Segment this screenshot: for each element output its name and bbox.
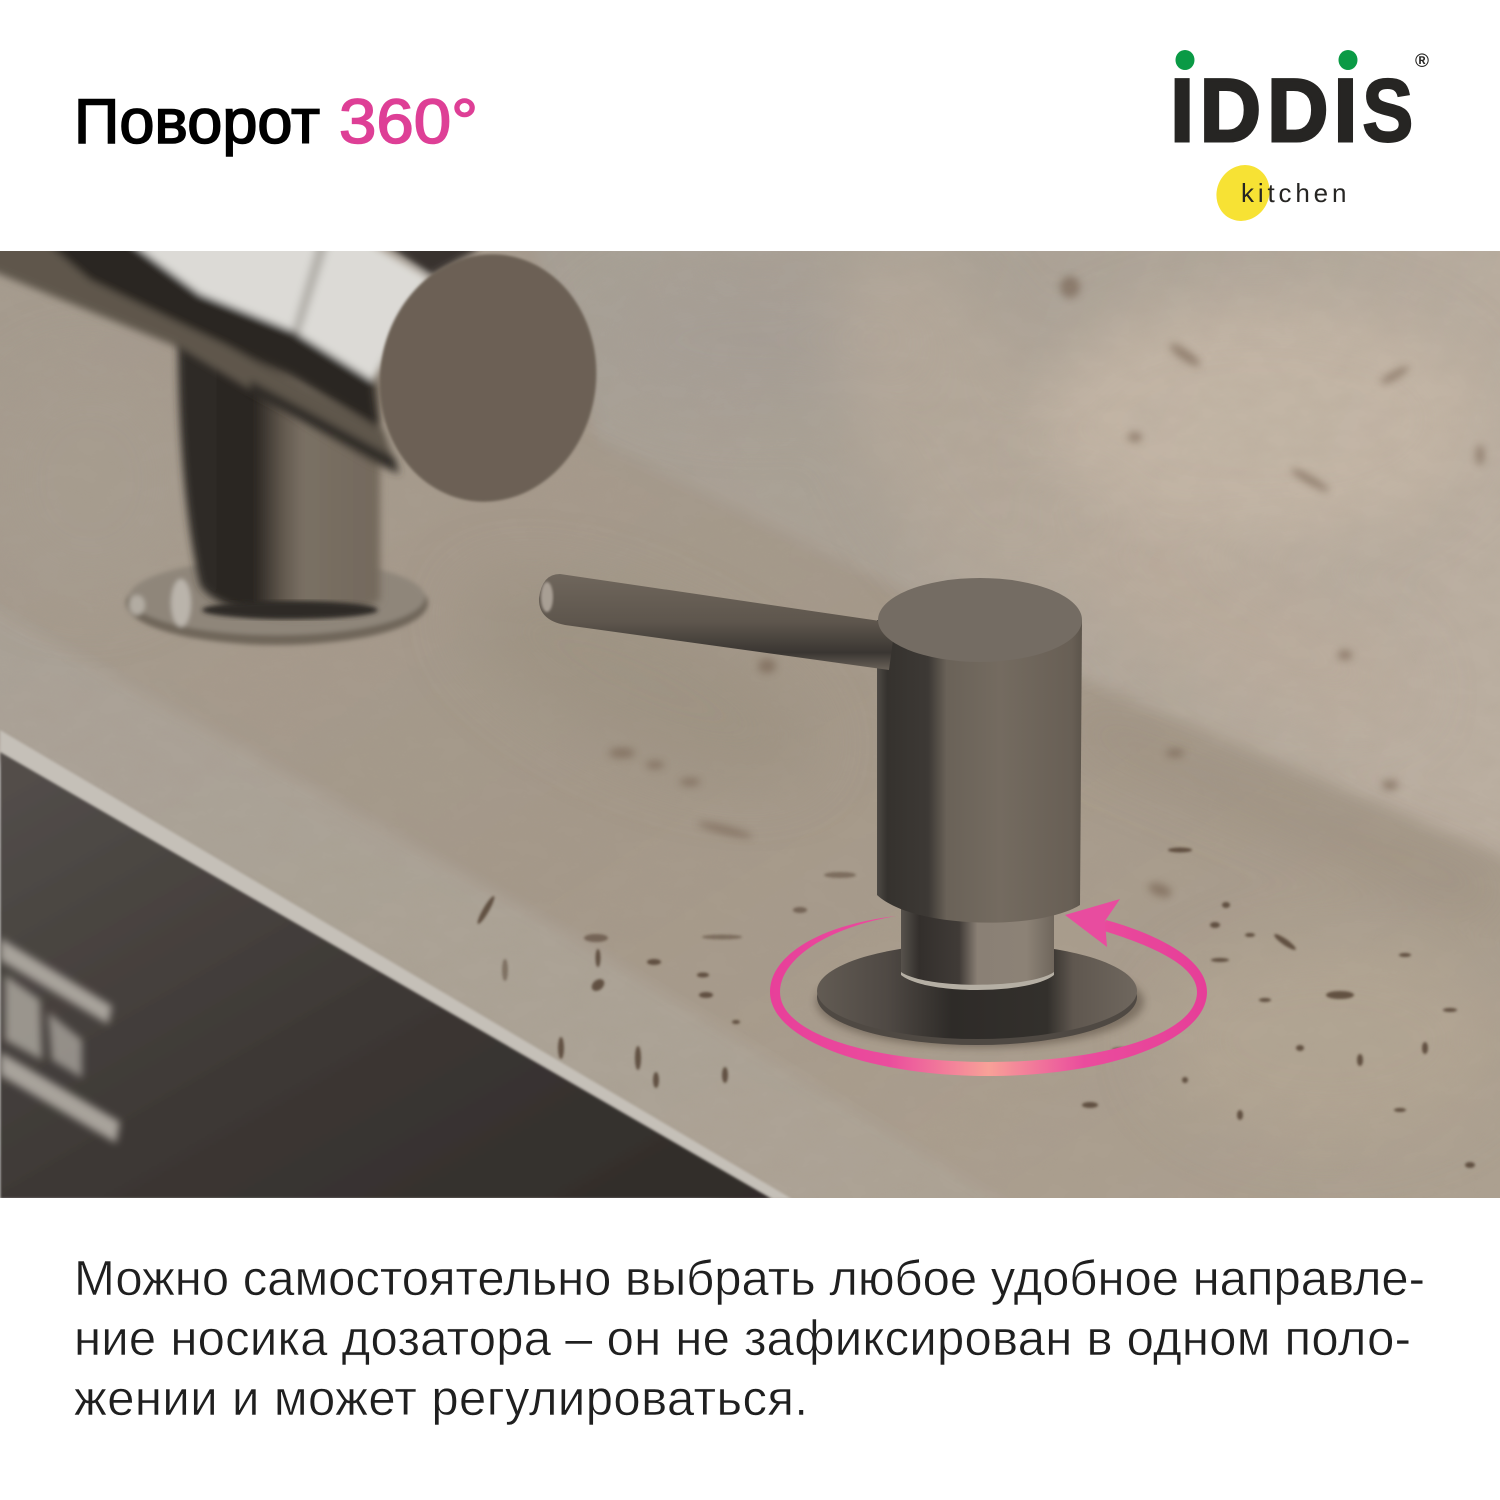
spout underside [0, 251, 396, 470]
spout tip highlight [541, 582, 553, 612]
stone wall [527, 251, 1500, 864]
description text [74, 1252, 1425, 1426]
logo wordmark: IDDI [1170, 61, 1357, 160]
sink logo plate [0, 938, 120, 1143]
faucet stem [178, 330, 380, 617]
contact shadow [816, 956, 1144, 1048]
dark sink [0, 752, 772, 1199]
stone texture [0, 251, 1500, 1198]
cylinder body [877, 620, 1082, 923]
title accent: 360° [339, 87, 478, 157]
logo: iddis kitchen [1170, 50, 1429, 230]
arrowhead [1065, 899, 1120, 947]
neck [901, 905, 1054, 990]
faucet spout [0, 251, 482, 478]
spout lower dark line [250, 380, 399, 474]
registered mark: ® [1415, 51, 1429, 72]
line 2: ние носика дозатора – он не зафиксирован в одном поло- [74, 1312, 1411, 1366]
collar seam [292, 240, 330, 335]
background faucet [0, 220, 612, 645]
sink rim highlight [0, 730, 792, 1199]
spout top dark edge [350, 220, 490, 276]
logo wordmark: S [1362, 61, 1413, 160]
faucet flange [126, 559, 428, 645]
rotation arrow [770, 899, 1207, 1076]
travertine specks [475, 848, 1475, 1168]
title word: Поворот [74, 87, 320, 157]
line 3: жении и может регулироваться. [74, 1372, 808, 1426]
faucet end cap [364, 240, 612, 516]
stone surfaces [0, 200, 1500, 1240]
soft blurred stains [609, 276, 1484, 900]
yellow spot [1207, 156, 1279, 230]
arc [770, 916, 1207, 1076]
cylinder top [878, 578, 1082, 662]
faucet stem base shadow [202, 601, 378, 619]
stone front face [0, 602, 1010, 1198]
kitchen wordmark: kitchen [1241, 178, 1350, 208]
spout dark band [52, 251, 384, 430]
spout highlight [129, 251, 432, 388]
product photo [0, 200, 1500, 1240]
title [74, 87, 478, 157]
stone deck [0, 200, 1500, 1240]
spout lever [539, 574, 893, 670]
dispenser [539, 574, 1207, 1076]
stone tonal variation [884, 302, 1450, 550]
base plate [817, 943, 1137, 1045]
line 1: Можно самостоятельно выбрать любое удобное направле- [74, 1252, 1425, 1306]
logo dots [1176, 50, 1358, 70]
